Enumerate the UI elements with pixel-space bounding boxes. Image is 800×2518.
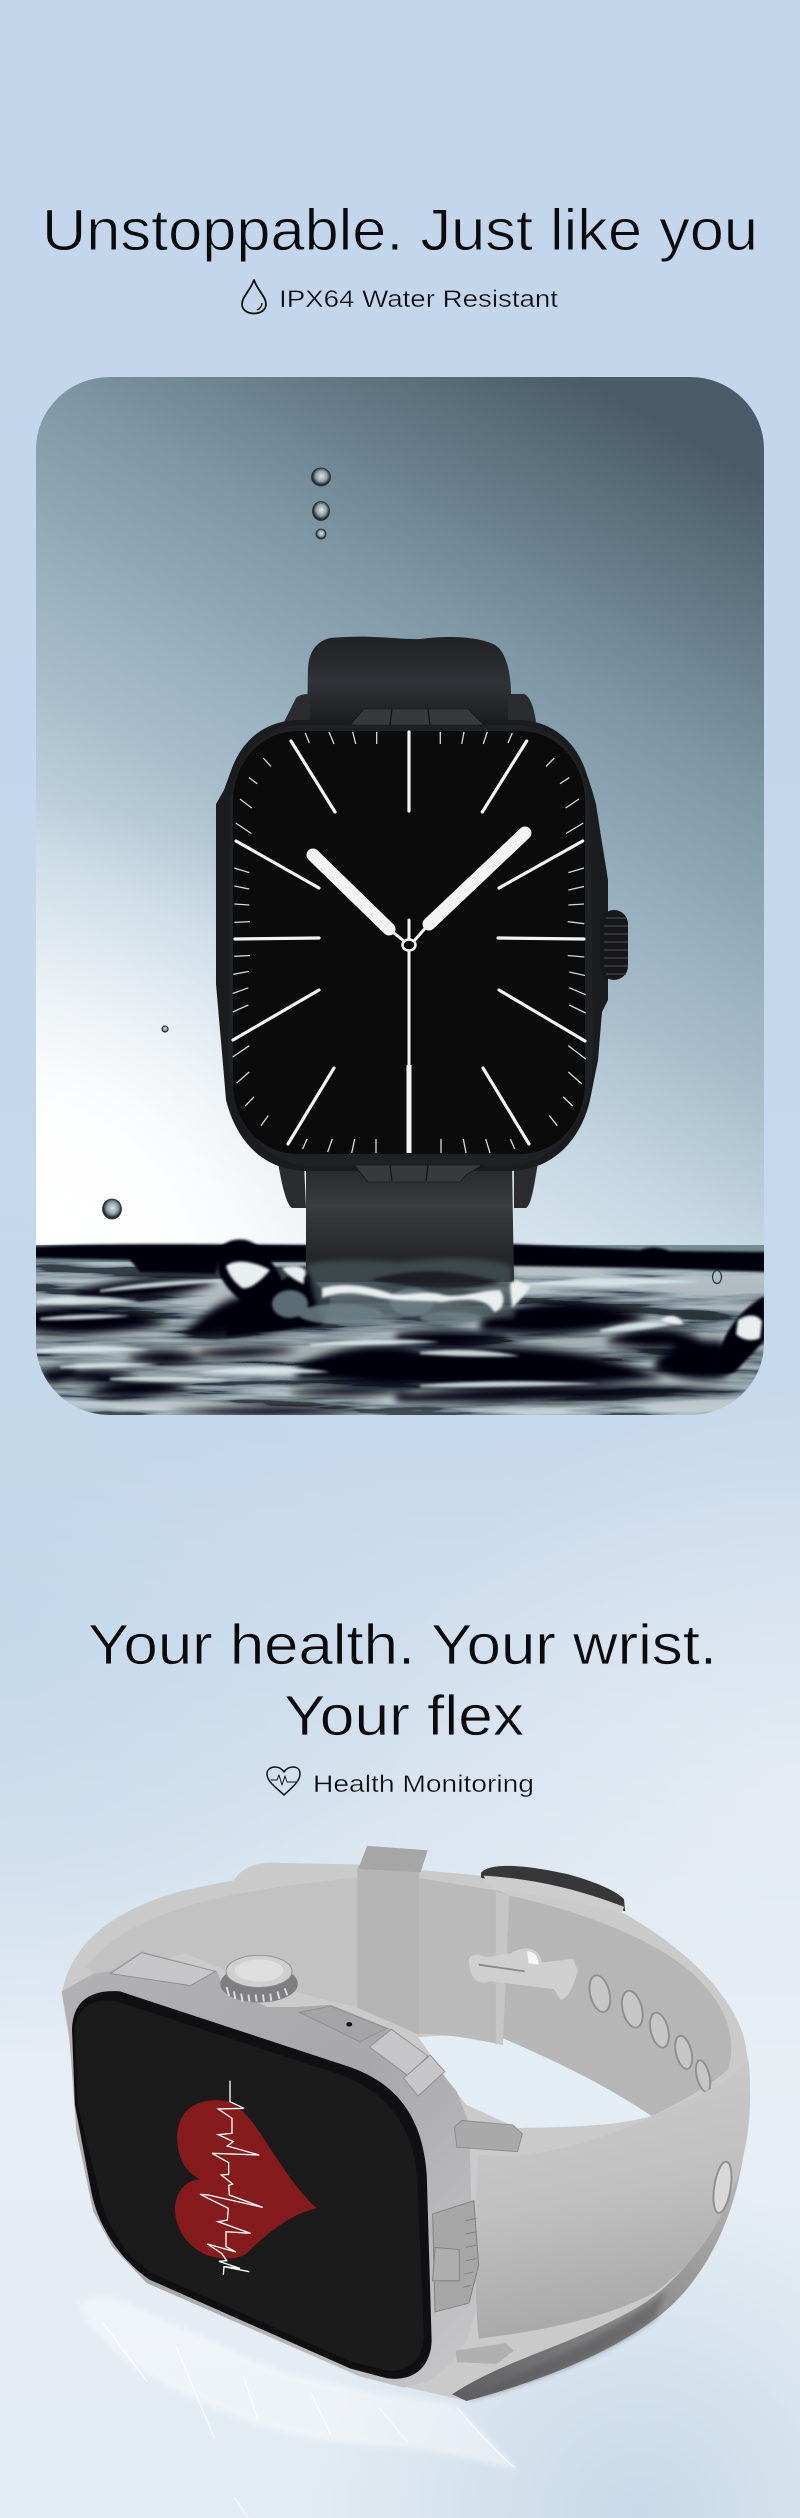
band inner hole showing background <box>418 2036 652 2128</box>
strap holes <box>586 1973 713 2093</box>
far band outer <box>62 1863 750 2401</box>
lower band shadow <box>467 2292 665 2401</box>
lower lug <box>456 2343 514 2364</box>
strap loop keeper <box>357 1846 428 2035</box>
heading: Your health. Your wrist. Your flex <box>88 1613 717 1748</box>
heading: Your health. Your wrist. Your flex: Your health. Your wrist. <box>88 1613 717 1677</box>
right lug <box>454 2121 522 2152</box>
watch strap bottom <box>306 1165 514 1282</box>
watch screen bezel <box>72 1991 432 2379</box>
strap reflection in water <box>306 1259 514 1318</box>
top and bottom case clips <box>350 709 484 1182</box>
dark horizon band <box>30 1244 770 1274</box>
dark splash crown left <box>217 1239 330 1336</box>
text: Health Monitoring: Health Monitoring <box>313 1771 534 1798</box>
crown <box>604 910 628 980</box>
watch: silver smartwatch with band <box>62 1846 750 2401</box>
icon: red heart with heartbeat line <box>175 2081 317 2275</box>
crown <box>220 1955 298 2003</box>
light ripple highlights <box>36 1277 700 1387</box>
near band lower <box>452 2158 743 2401</box>
far band inner surface left <box>86 1878 357 2007</box>
lugs <box>278 694 538 1208</box>
mic hole <box>346 2022 352 2027</box>
case details <box>110 1953 445 2096</box>
hour markers <box>233 732 585 1144</box>
buckle pin <box>469 1948 578 2000</box>
watch hands <box>313 833 525 1153</box>
near band main <box>475 2060 750 2339</box>
silver splash highlights <box>226 1262 762 1340</box>
dark ripples <box>30 1278 745 1416</box>
watch screen <box>75 2001 424 2371</box>
feature row: water resistant <box>242 280 558 314</box>
foam clusters <box>272 1288 480 1324</box>
reflection below silver watch <box>79 2297 517 2518</box>
watch case <box>216 720 608 1171</box>
dark droplet right <box>718 1296 765 1374</box>
buckle with dark tip <box>481 1866 625 1913</box>
heading: Your health. Your wrist. Your flex: Your flex <box>284 1684 524 1748</box>
side hole <box>710 2161 735 2214</box>
water surface <box>30 1244 770 1420</box>
panel: water photo card <box>30 377 770 1420</box>
icon: falling water droplets <box>102 468 330 1219</box>
watch: black smartwatch on water <box>216 637 628 1282</box>
water splash around strap <box>217 1239 765 1374</box>
watch screen <box>233 731 585 1154</box>
minute ticks <box>233 732 586 1153</box>
watch case frame <box>62 1951 476 2388</box>
text: IPX64 Water Resistant: IPX64 Water Resistant <box>279 286 558 313</box>
band section with holes <box>503 1896 731 2116</box>
band under buckle <box>418 1878 509 2045</box>
heading: Unstoppable. Just like you: Unstoppable. Just like you <box>42 198 758 263</box>
watch strap top <box>307 637 511 722</box>
icon: heart with pulse <box>267 1767 300 1795</box>
side buttons <box>433 2201 479 2312</box>
feature row: health monitoring <box>267 1767 534 1798</box>
icon: water drop <box>242 280 266 314</box>
